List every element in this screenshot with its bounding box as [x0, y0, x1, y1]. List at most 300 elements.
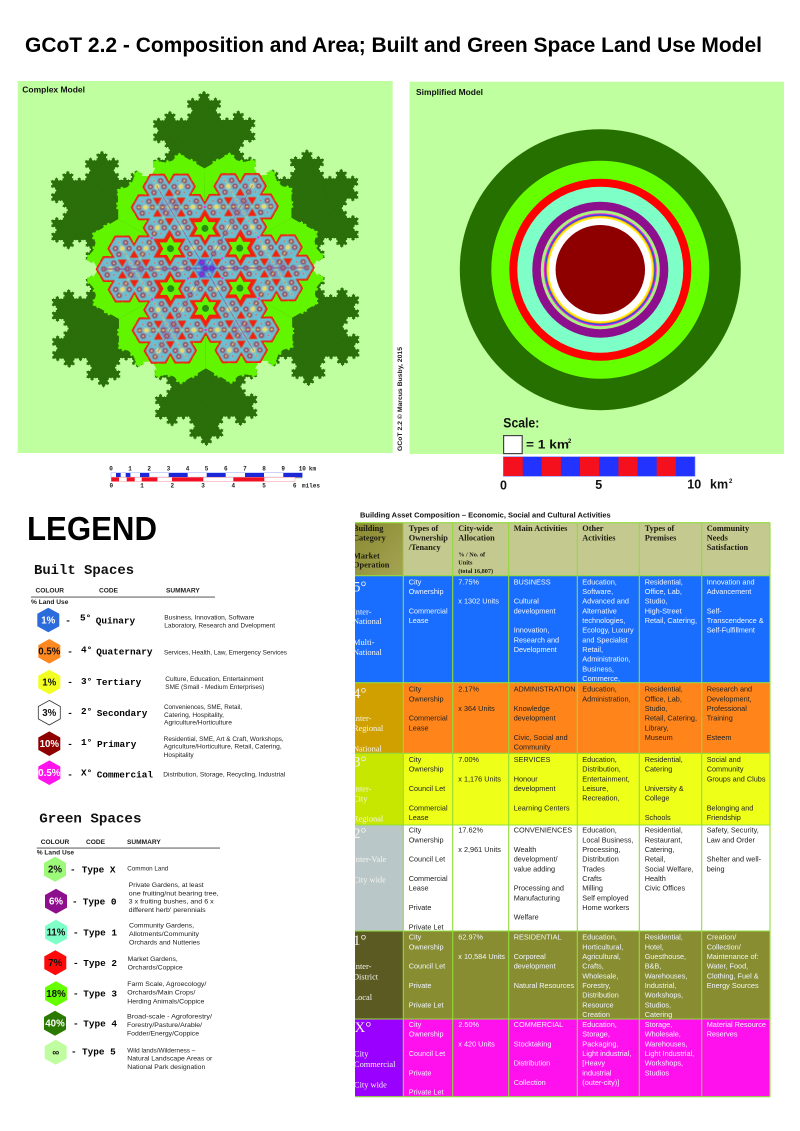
row: X degree commercial: Studios: [645, 1068, 669, 1077]
row: 1 primary: -: [67, 739, 73, 750]
row: X degree commercial: COMMERCIAL: [514, 1020, 563, 1029]
row: 5 degree business: Research and: [514, 635, 559, 644]
row: 2 degree conveniences: Private Let: [409, 922, 444, 931]
row: 5 quinary: Laboratory, Research and Dvelopment: [164, 622, 275, 629]
row: 2 secondary: Catering, Hospitality,: [164, 712, 224, 719]
header row: Types of: [409, 524, 438, 533]
row: 1 degree residential: Forestry,: [582, 981, 611, 990]
row: 3 degree services: Honour: [514, 774, 538, 783]
row: 5 degree business: technologies,: [582, 616, 625, 625]
row: 3 degree services: Regional: [353, 815, 384, 824]
map scale bar: 1: [128, 466, 132, 473]
map scale bar: 2: [170, 482, 174, 489]
header row: Premises: [645, 533, 677, 542]
row: 1 degree residential: Agricultural,: [582, 952, 621, 961]
header row: Ownership: [409, 533, 448, 542]
row: 5 quinary: Quinary: [96, 615, 135, 626]
row: 3 degree services: Catering: [645, 765, 672, 774]
panel: complex model: [18, 81, 393, 453]
row: X degree commercial: [Heavy: [582, 1059, 605, 1068]
row: 1 degree residential: Distribution: [582, 991, 619, 1000]
row: type 3: Farm Scale, Agroecology/: [127, 981, 206, 988]
row: 5 quinary: [37, 608, 275, 632]
row: 2 degree conveniences: Commercial: [409, 874, 448, 883]
map scale bar: 4: [231, 482, 235, 489]
row: type 1: Orchards and Nutteries: [129, 939, 201, 946]
row: 3 degree services: Recreation,: [582, 794, 620, 803]
row: 1 degree residential: Wholesale,: [582, 971, 618, 980]
row: 1 degree residential: Hotel,: [645, 942, 664, 951]
row: type 0: [45, 882, 219, 914]
header row: (total 16,807): [458, 568, 493, 575]
row: 3 degree services: Lease: [409, 813, 429, 822]
type 4 forest snowflakes: [50, 90, 360, 447]
row: 2 degree conveniences: 2°: [353, 826, 366, 842]
row: 1 degree residential: B&B,: [645, 962, 661, 971]
row: X degree commercial: industrial: [582, 1068, 612, 1077]
row: 4 degree administration: Research and: [707, 685, 752, 694]
row: 1 degree residential: development: [514, 962, 555, 971]
row: 5 degree business: Commercial: [409, 606, 448, 615]
row: 1 degree residential: Workshops,: [645, 991, 683, 1000]
row: 5 degree business: [353, 576, 770, 683]
row: 2 degree conveniences: Welfare: [514, 913, 539, 922]
type 2 market garden border: [95, 173, 315, 364]
row: type 5: ∞: [52, 1048, 59, 1059]
header row: Units: [458, 559, 473, 566]
header row: Building: [353, 524, 383, 533]
row: 3 degree services: Inter-: [353, 785, 371, 794]
row: 4 degree administration: Knowledge: [514, 704, 550, 713]
row: X degree commercial: City: [354, 1050, 368, 1059]
row: 4 quaternary: Quaternary: [96, 647, 153, 658]
row: X degree commercial: Distribution: [514, 1059, 550, 1068]
area scale: = 1 km: [526, 437, 569, 451]
row: X degree commercial: Material Resource: [707, 1020, 766, 1029]
row: 2 degree conveniences: Catering,: [645, 845, 674, 854]
row: type 1: Community Gardens,: [129, 923, 194, 930]
row: type 3: -: [73, 989, 79, 1000]
row: 1 primary: [38, 731, 284, 759]
row: 4 degree administration: Studio,: [645, 704, 667, 713]
row: 1 degree residential: Guesthouse,: [645, 952, 686, 961]
row: type 5: -: [71, 1047, 77, 1058]
row: 3 degree services: Entertainment,: [582, 774, 630, 783]
green table header: CODE: [86, 839, 106, 846]
row: 3 degree services: Belonging and: [707, 803, 753, 812]
row: 5 quinary: Business, Innovation, Software: [164, 615, 255, 622]
row: 2 degree conveniences: Home workers: [582, 903, 630, 912]
row: type 3: Herding Animals/Coppice: [127, 998, 205, 1005]
row: X commercial: [38, 760, 285, 785]
row: 2 degree conveniences: Restaurant,: [645, 835, 682, 844]
row: 4 degree administration: 2.17%: [458, 685, 479, 694]
green star courtyards: [159, 216, 251, 321]
row: 4 quaternary: [38, 639, 287, 664]
row: 5 degree business: 7.75%: [458, 577, 479, 586]
area scale: 0: [500, 478, 507, 492]
row: 5 quinary: 5°: [80, 613, 91, 624]
row: 5 degree business: Self-: [707, 606, 722, 615]
row: 2 degree conveniences: Retail,: [645, 855, 665, 864]
row: 5 degree business: Retail,: [582, 645, 603, 654]
row: 2 degree conveniences: x 2,961 Units: [458, 845, 501, 854]
map scale bar: 2: [147, 466, 151, 473]
row: 5 degree business: Inter-: [353, 607, 371, 616]
row: type 0: different herb' perennials: [129, 907, 206, 914]
row: type 0: Type 0: [83, 897, 117, 908]
row: 2 degree conveniences: value adding: [514, 864, 555, 873]
row: 1 degree residential: City: [409, 933, 421, 942]
row: 3 tertiary: 1%: [42, 677, 57, 688]
header row: Market: [353, 551, 380, 560]
row: 1 primary: Hospitality: [164, 752, 195, 759]
row: 5 degree business: High-Street: [645, 606, 682, 615]
header row: Main Activities: [514, 524, 568, 533]
row: 4 degree administration: [353, 683, 770, 754]
row: 4 quaternary: -: [67, 647, 73, 658]
row: 1 degree residential: Creation/: [707, 933, 736, 942]
row: 1 degree residential: Education,: [582, 933, 617, 942]
row: 2 degree conveniences: Education,: [582, 826, 617, 835]
row: 1 degree residential: Catering: [645, 1010, 672, 1019]
map scale bar: 8: [262, 466, 266, 473]
row: 1 degree residential: Natural Resources: [514, 981, 574, 990]
row: 2 secondary: 3%: [42, 708, 57, 719]
row: 2 degree conveniences: Social Welfare,: [645, 864, 694, 873]
row: X degree commercial: Storage,: [645, 1020, 672, 1029]
row: 3 degree services: development: [514, 784, 555, 793]
row: 2 degree conveniences: Processing,: [582, 845, 620, 854]
table title: Building Asset Composition – Economic, Social and Cultural Activities: [360, 511, 611, 520]
row: X degree commercial: Stocktaking: [514, 1039, 551, 1048]
row: X degree commercial: Wholesale,: [645, 1030, 681, 1039]
row: 5 quinary: -: [65, 615, 71, 626]
row: 4 degree administration: Ownership: [409, 694, 444, 703]
row: 4 degree administration: Development,: [707, 694, 752, 703]
row: 4 degree administration: Community: [514, 743, 551, 752]
magenta junction dots: [150, 205, 260, 331]
row: 2 degree conveniences: Shelter and well-: [707, 855, 762, 864]
row: 2 degree conveniences: Lease: [409, 884, 429, 893]
row: 2 degree conveniences: 17.62%: [458, 826, 483, 835]
row: 2 secondary: -: [67, 708, 73, 719]
row: 1 degree residential: Crafts,: [582, 962, 604, 971]
row: X degree commercial: City: [409, 1020, 421, 1029]
row: type 4: Fodder/Energy/Coppice: [127, 1030, 199, 1037]
row: X commercial: Distribution, Storage, Recycling, Industrial: [163, 772, 285, 779]
header row: Types of: [645, 524, 674, 533]
row: 4 quaternary: 0.5%: [38, 647, 61, 658]
row: type 0: Private Gardens, at least: [129, 882, 204, 889]
row: 5 degree business: Cultural: [514, 597, 539, 606]
row: X degree commercial: (outer-city)]: [582, 1078, 619, 1087]
row: 3 degree services: 7.00%: [458, 755, 479, 764]
row: 3 tertiary: [38, 670, 264, 694]
row: 2 degree conveniences: Law and Order: [707, 835, 756, 844]
row: type 5: National Park designation: [127, 1064, 206, 1071]
row: type 5: Natural Landscape Areas or: [127, 1056, 213, 1063]
area scale: 10: [687, 477, 701, 491]
map scale bar: 1: [140, 482, 144, 489]
row: 3 degree services: College: [645, 794, 669, 803]
built table header: COLOUR: [36, 588, 64, 595]
row: 2 degree conveniences: Milling: [582, 884, 603, 893]
row: type 3: 18%: [46, 989, 66, 1000]
row: 5 degree business: City: [409, 577, 421, 586]
row: 3 degree services: SERVICES: [514, 755, 550, 764]
header row: Needs: [707, 533, 729, 542]
row: type 0: 6%: [49, 897, 63, 908]
row: X degree commercial: Education,: [582, 1020, 617, 1029]
row: 5 degree business: Studio,: [645, 597, 667, 606]
map scale bar: 5: [262, 482, 266, 489]
area scale: km: [710, 477, 728, 491]
row: 3 degree services: Ownership: [409, 765, 444, 774]
row: type 5: Wild lands/Wilderness –: [127, 1047, 196, 1054]
row: 3 degree services: Learning Centers: [514, 803, 570, 812]
row: 4 degree administration: Inter-: [353, 714, 371, 723]
map scale bar: 0: [109, 466, 113, 473]
row: 5 degree business: Advanced and: [582, 597, 629, 606]
row: 3 degree services: [353, 753, 770, 825]
row: X degree commercial: Light industrial,: [582, 1049, 631, 1058]
row: 4 degree administration: ADMINISTRATION: [514, 685, 576, 694]
row: 2 degree conveniences: Crafts: [582, 874, 602, 883]
row: 4 degree administration: x 364 Units: [458, 704, 495, 713]
row: 5 degree business: Innovation,: [514, 626, 549, 635]
row: X degree commercial: 2.50%: [458, 1020, 479, 1029]
row: 4 degree administration: Administration,: [582, 694, 631, 703]
row: 5 degree business: Alternative: [582, 606, 617, 615]
row: type X: [44, 857, 169, 882]
built hexaflake districts: [98, 175, 313, 362]
row: 3 tertiary: -: [67, 677, 73, 688]
row: 3 degree services: 3°: [353, 755, 366, 771]
row: type 2: Orchards/Coppice: [128, 965, 183, 972]
row: 2 degree conveniences: Residential,: [645, 826, 683, 835]
header row: Satisfaction: [707, 543, 749, 552]
header row: Community: [707, 524, 749, 533]
row: 2 secondary: [38, 700, 242, 727]
header row: Operation: [353, 561, 390, 570]
row: 2 degree conveniences: Wealth: [514, 845, 536, 854]
row: 3 degree services: Distribution,: [582, 765, 621, 774]
map scale bar: 6: [293, 482, 297, 489]
row: type 2: 7%: [48, 958, 63, 969]
row: 3 degree services: Groups and Clubs: [707, 774, 766, 783]
row: type 3: Orchards/Main Crops/: [127, 990, 195, 997]
row: 3 degree services: Social and: [707, 755, 741, 764]
row: 5 degree business: Ownership: [409, 587, 444, 596]
row: type X: Common Land: [127, 866, 169, 873]
header row: City-wide: [458, 524, 493, 533]
row: type 2: Type 2: [83, 958, 117, 969]
row: 3 degree services: Friendship: [707, 813, 741, 822]
row: 1 primary: Residential, SME, Art & Craft, Workshops,: [164, 736, 284, 743]
map scale bar: 9: [281, 466, 285, 473]
row: 5 degree business: development: [514, 606, 555, 615]
row: X degree commercial: Storage,: [582, 1030, 610, 1039]
row: X degree commercial: X°: [354, 1020, 371, 1036]
row: 2 degree conveniences: Processing and: [514, 884, 564, 893]
row: X degree commercial: Private Let: [409, 1088, 444, 1097]
row: 5 degree business: Ecology, Luxury: [582, 626, 634, 635]
row: 2 degree conveniences: Health: [645, 874, 666, 883]
panel: simplified model: [410, 82, 784, 492]
map scale bar: 3: [167, 466, 171, 473]
row: 4 degree administration: Residential,: [645, 685, 683, 694]
row: 1 degree residential: Corporeal: [514, 952, 546, 961]
header row: Other: [582, 524, 604, 533]
map scale bar: 3: [201, 482, 205, 489]
row: type 4: 40%: [45, 1019, 65, 1030]
row: 3 degree services: x 1,176 Units: [458, 774, 501, 783]
row: 2 degree conveniences: City: [409, 826, 421, 835]
row: type 1: 11%: [47, 928, 66, 939]
row: type 0: -: [72, 897, 78, 908]
row: X degree commercial: x 420 Units: [458, 1039, 495, 1048]
row: 2 degree conveniences: Civic Offices: [645, 884, 685, 893]
row: 4 degree administration: Esteem: [707, 733, 731, 742]
row: X degree commercial: City wide: [354, 1081, 387, 1090]
built table header: SUMMARY: [166, 588, 200, 595]
row: 2 degree conveniences: Distribution: [582, 855, 619, 864]
panel label: Simplified Model: [416, 88, 483, 97]
row: 5 degree business: Retail, Catering,: [645, 616, 697, 625]
header row: Activities: [582, 533, 616, 542]
row: 3 degree services: Community: [707, 765, 744, 774]
row: type 3: [45, 981, 206, 1006]
panel: green spaces legend: [37, 812, 220, 1071]
row: 4 quaternary: Services, Health, Law, Emergency Services: [164, 649, 287, 656]
row: type X: 2%: [48, 865, 62, 876]
row: 1 primary: Agriculture/Horticulture, Retail, Catering,: [164, 744, 282, 751]
row: type 2: Market Gardens,: [128, 956, 178, 963]
row: 3 tertiary: SME (Small - Medium Enterprises): [165, 684, 264, 691]
row: 4 quaternary: 4°: [81, 645, 92, 656]
row: type 4: Type 4: [83, 1019, 117, 1030]
row: X commercial: X°: [81, 768, 92, 779]
row: type 4: -: [73, 1019, 79, 1030]
row: 5 degree business: Office, Lab,: [645, 587, 682, 596]
row: 5 degree business: Administration,: [582, 655, 631, 664]
row: X degree commercial: Collection: [514, 1078, 546, 1087]
row: 4 degree administration: 4°: [353, 686, 366, 702]
type 3 farm belt: [77, 152, 333, 385]
row: 4 degree administration: Lease: [409, 723, 429, 732]
header row: [353, 523, 770, 576]
row: 4 degree administration: Civic, Social and: [514, 733, 568, 742]
row: type X: -: [70, 865, 76, 876]
row: 1 degree residential: 1°: [353, 933, 366, 949]
chart: fractal city map: [50, 90, 360, 447]
row: X commercial: -: [67, 769, 73, 780]
row: 1 primary: 1°: [81, 737, 92, 748]
map scale bar: 4: [186, 466, 190, 473]
row: 4 degree administration: Library,: [645, 723, 668, 732]
copyright: GCoT 2.2 © Marcus Busby, 2015: [396, 347, 404, 451]
row: 4 degree administration: Education,: [582, 685, 617, 694]
row: 3 degree services: Commercial: [409, 803, 448, 812]
row: 4 degree administration: City: [409, 685, 421, 694]
row: 5 degree business: Residential,: [645, 577, 683, 586]
row: 5 degree business: x 1302 Units: [458, 597, 499, 606]
row: 1 degree residential: Warehouses,: [645, 971, 687, 980]
map scale bar: 5: [205, 466, 209, 473]
row: 4 degree administration: Commercial: [409, 714, 448, 723]
row: 2 secondary: Secondary: [97, 708, 148, 719]
row: 3 tertiary: 3°: [81, 676, 92, 687]
green table header: % Land Use: [37, 849, 74, 856]
row: 2 secondary: 2°: [81, 706, 92, 717]
area scale: Scale:: [503, 415, 539, 431]
row: type 4: Broad-scale - Agroforestry/: [127, 1013, 212, 1020]
row: X degree commercial: Workshops,: [645, 1059, 683, 1068]
area scale: 5: [595, 478, 602, 492]
row: 4 degree administration: Retail, Catering,: [645, 714, 697, 723]
row: 5 degree business: 5°: [353, 580, 366, 596]
green table header: COLOUR: [41, 839, 70, 846]
row: 5 degree business: National: [353, 617, 383, 626]
row: 3 degree services: Leisure,: [582, 784, 608, 793]
row: 5 degree business: Software,: [582, 587, 613, 596]
row: 1 degree residential: x 10,584 Units: [458, 952, 505, 961]
row: 2 degree conveniences: Manufacturing: [514, 893, 560, 902]
row: 5 degree business: Business,: [582, 664, 614, 673]
map scale bar: 10: [299, 466, 306, 473]
row: 1 degree residential: District: [353, 972, 379, 981]
header row: Category: [353, 534, 387, 543]
header row: Allocation: [458, 533, 495, 542]
row: type 2: -: [73, 958, 79, 969]
row: 1 degree residential: Residential,: [645, 933, 683, 942]
row: 2 degree conveniences: being: [707, 864, 725, 873]
row: 3 degree services: City: [409, 755, 421, 764]
row: 3 degree services: Council Let: [409, 784, 445, 793]
row: X degree commercial: [354, 1019, 770, 1097]
row: 1 degree residential: Local: [353, 993, 373, 1002]
row: X commercial: 0.5%: [38, 768, 61, 779]
area scale: [500, 415, 733, 492]
area scale: 2: [729, 479, 733, 485]
panel: building asset table: [340, 520, 770, 1100]
header row: % / No. of: [458, 552, 485, 559]
row: 4 degree administration: Training: [707, 714, 733, 723]
row: 1 degree residential: Energy Sources: [707, 981, 759, 990]
map scale bar: miles: [302, 482, 320, 489]
row: 1 degree residential: Private Let: [409, 1000, 444, 1009]
row: 3 degree services: Schools: [645, 813, 671, 822]
row: 5 degree business: Multi-: [353, 638, 375, 647]
legend heading: LEGEND: [27, 510, 157, 547]
row: 5 degree business: Self-Fulfillment: [707, 626, 755, 635]
row: 5 degree business: Innovation and: [707, 577, 755, 586]
row: 2 degree conveniences: [353, 825, 770, 931]
map scale bar: 6: [224, 466, 228, 473]
row: X degree commercial: Warehouses,: [645, 1039, 687, 1048]
row: type 0: 3 x fruiting bushes, and 6 x: [129, 898, 214, 905]
row: 2 degree conveniences: Inter-Vale: [353, 855, 386, 864]
row: 5 degree business: BUSINESS: [514, 577, 551, 586]
row: 1 degree residential: Water, Food,: [707, 962, 748, 971]
row: 1 degree residential: Collection/: [707, 942, 742, 951]
row: X commercial: Commercial: [97, 769, 153, 780]
row: 2 degree conveniences: Safety, Security,: [707, 826, 759, 835]
row: type 1: Type 1: [83, 928, 117, 939]
row: X degree commercial: Commercial: [354, 1060, 396, 1069]
row: 1 primary: Primary: [97, 739, 137, 750]
